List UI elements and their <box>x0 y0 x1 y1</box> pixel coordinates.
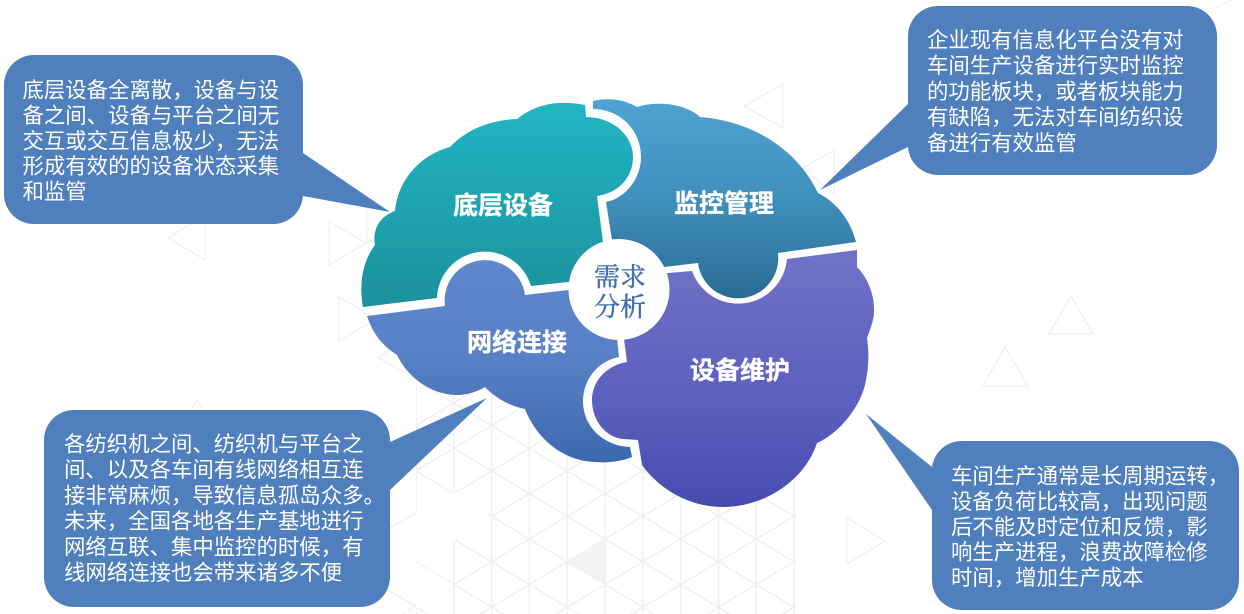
callout text: 底层设备: 交互或交互信息极少，无法 <box>22 129 279 153</box>
callout text: 监控管理: 有缺陷，无法对车间纺织设 <box>927 106 1184 130</box>
callout text: 设备维护: 车间生产通常是长周期运转， <box>951 464 1229 488</box>
callout text: 底层设备: 和监管 <box>22 180 87 204</box>
center circle: 需求分析 <box>568 239 670 340</box>
callout: 监控管理 <box>820 6 1217 190</box>
callout text: 底层设备: 底层设备全离散，设备与设 <box>22 78 279 102</box>
center circle: 需求分析: 分析 <box>594 293 646 322</box>
callout text: 设备维护: 响生产进程，浪费故障检修 <box>951 541 1208 565</box>
brain piece: 底层设备 <box>361 103 633 307</box>
callout text: 网络连接: 间、以及各车间有线网络相互连 <box>64 458 363 482</box>
callout text: 监控管理: 的功能板块，或者板块能力 <box>927 80 1184 104</box>
callout text: 底层设备: 形成有效的的设备状态采集 <box>22 155 279 179</box>
callout text: 网络连接: 线网络连接也会带来诸多不便 <box>64 561 342 585</box>
callout text: 监控管理: 企业现有信息化平台没有对 <box>927 28 1184 52</box>
callout: 底层设备 <box>4 55 390 224</box>
callout text: 设备维护 <box>951 464 1229 590</box>
callout: 网络连接 <box>44 398 487 607</box>
callout: 设备维护 <box>866 414 1239 610</box>
brain piece: 监控管理 <box>593 99 856 298</box>
brain piece: 设备维护: 设备维护 <box>690 357 790 385</box>
callout text: 监控管理: 备进行有效监管 <box>927 131 1077 155</box>
callout text: 网络连接: 未来，全国各地各生产基地进行 <box>64 510 363 534</box>
callout text: 底层设备 <box>22 78 279 204</box>
callout text: 网络连接: 接非常麻烦，导致信息孤岛众多。 <box>64 484 385 508</box>
brain diagram <box>361 99 874 507</box>
brain piece: 网络连接 <box>367 260 632 462</box>
callout text: 设备维护: 设备负荷比较高，出现问题 <box>951 490 1208 514</box>
brain piece: 底层设备: 底层设备 <box>453 192 553 220</box>
callout text: 监控管理: 车间生产设备进行实时监控 <box>927 54 1184 78</box>
callout text: 设备维护: 后不能及时定位和反馈，影 <box>951 515 1208 539</box>
brain piece: 设备维护 <box>592 250 874 507</box>
callout text: 网络连接 <box>64 432 385 585</box>
callout text: 网络连接: 各纺织机之间、纺织机与平台之 <box>64 432 363 456</box>
callout text: 设备维护: 时间，增加生产成本 <box>951 566 1144 590</box>
center circle: 需求分析: 需求 <box>594 263 646 292</box>
callout text: 网络连接: 网络互联、集中监控的时候，有 <box>64 535 363 559</box>
brain piece: 监控管理: 监控管理 <box>674 190 774 218</box>
callout text: 监控管理 <box>927 28 1184 155</box>
brain piece: 网络连接: 网络连接 <box>467 329 567 357</box>
callout text: 底层设备: 备之间、设备与平台之间无 <box>22 104 279 128</box>
